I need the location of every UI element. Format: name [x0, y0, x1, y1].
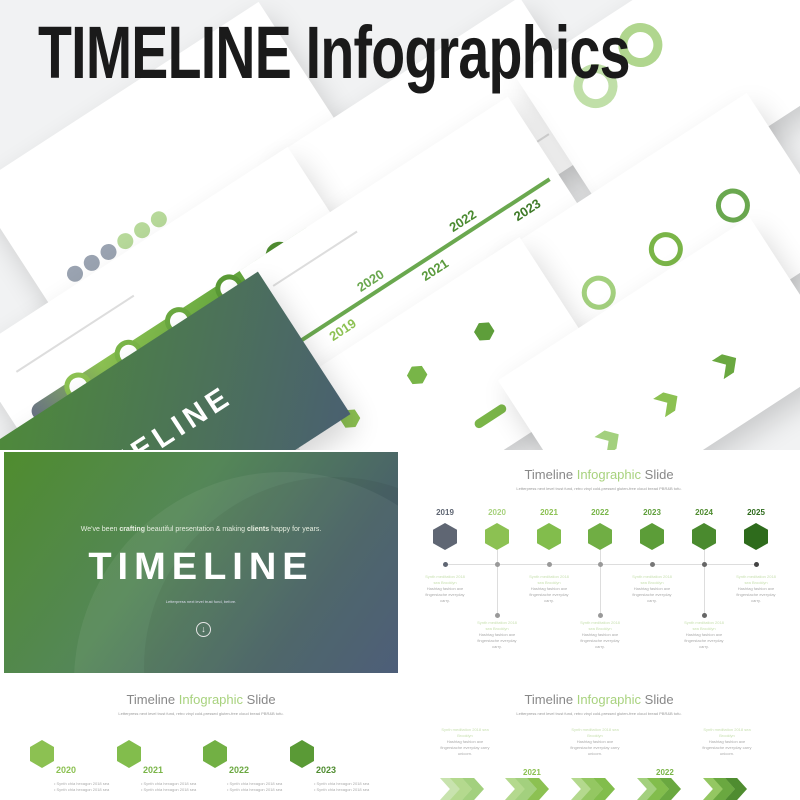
- chevron items: 2022: [656, 768, 674, 777]
- timeline items: 2024: [695, 508, 713, 517]
- card: rings right: [495, 93, 800, 407]
- timeline axis: [444, 564, 756, 565]
- timeline items: 2021: [540, 508, 558, 517]
- chevron items: [440, 727, 752, 800]
- card: bars: [268, 0, 612, 303]
- hexagon items: • Synth chia hexagon 2018 sea: [227, 787, 282, 792]
- panel: hexagon timeline slide: Letterpress next level trust fund, retro vinyl cold-pressed gluten-free cloud bread PBR&B tofu.: [516, 486, 682, 491]
- chevron items: Hashtag fashion axe fingerstache everyday carry unicorn.: [702, 739, 752, 756]
- card: 2019-2023 timeline: 2023: [511, 196, 543, 224]
- card: 2019-2023 timeline: 2020: [354, 266, 387, 295]
- chevron items: 2021: [523, 768, 541, 777]
- timeline items: 2019: [436, 508, 454, 517]
- panel: hexagon timeline slide: [425, 470, 776, 649]
- hexagon items: • Synth chia hexagon 2018 sea: [141, 781, 196, 786]
- small text: Letterpress next level trust fund, before.: [166, 599, 236, 604]
- panel: vertical hexagon slide: [30, 694, 370, 792]
- slide title: Timeline Infographic Slide: [524, 467, 674, 482]
- panel: timeline cover slide: [4, 452, 398, 673]
- timeline items: Hashtag fashion axe fingerstache everyday carry.: [632, 586, 672, 603]
- icon: down arrow circle: [196, 622, 211, 637]
- hexagon items: [30, 740, 370, 792]
- title: TIMELINE Infographics: [38, 11, 630, 94]
- timeline items: Hashtag fashion axe fingerstache everyday carry.: [425, 586, 465, 603]
- panel: chevron arrow slide: Letterpress next level trust fund, retro vinyl cold-pressed gluten-free cloud bread PBR&B tofu.: [516, 711, 682, 716]
- timeline items: Synth meditation 2018 sea Brooklyn: [529, 574, 569, 585]
- collage: perspective slide mockups: [0, 0, 800, 450]
- card: rings top right: [515, 0, 800, 227]
- card: 2019-2023 timeline: 2022: [446, 207, 479, 235]
- chevron items: Synth meditation 2018 sea Brooklyn: [571, 727, 619, 738]
- panel: vertical hexagon slide: Letterpress next level trust fund, retro vinyl cold-pressed gluten-free cloud bread PBR&B tofu.: [118, 711, 284, 716]
- timeline items: Synth meditation 2018 sea Brooklyn: [477, 620, 517, 631]
- card: wavy chain: [0, 147, 391, 513]
- chevron items: Synth meditation 2018 sea Brooklyn: [703, 727, 751, 738]
- card: circles timeline: [0, 2, 357, 338]
- hexagon items: • Synth chia hexagon 2018 sea: [54, 781, 109, 786]
- timeline items: 2023: [643, 508, 661, 517]
- hexagon items: 2023: [316, 765, 336, 775]
- timeline items: Hashtag fashion axe fingerstache everyday carry.: [736, 586, 776, 603]
- timeline items: 2025: [747, 508, 765, 517]
- hexagon items: • Synth chia hexagon 2018 sea: [314, 787, 369, 792]
- timeline items: Synth meditation 2018 sea Brooklyn: [580, 620, 620, 631]
- chevron items: Hashtag fashion axe fingerstache everyday carry unicorn.: [440, 739, 490, 756]
- timeline items: Hashtag fashion axe fingerstache everyday carry.: [580, 632, 620, 649]
- timeline items: Hashtag fashion axe fingerstache everyday carry.: [529, 586, 569, 603]
- card: arrows: [504, 227, 800, 450]
- hexagon items: • Synth chia hexagon 2018 sea: [54, 787, 109, 792]
- hexagon items: • Synth chia hexagon 2018 sea: [314, 781, 369, 786]
- hexagon items: • Synth chia hexagon 2018 sea: [227, 781, 282, 786]
- hexagon items: • Synth chia hexagon 2018 sea: [141, 787, 196, 792]
- heading: TIMELINE: TIMELINE: [88, 546, 314, 588]
- card: 2019-2023 timeline: [240, 97, 600, 413]
- icon: down arrow circle: ↓: [201, 624, 206, 634]
- timeline items: Hashtag fashion axe fingerstache everyday carry.: [684, 632, 724, 649]
- chevron items: Hashtag fashion axe fingerstache everyday carry unicorn.: [570, 739, 620, 756]
- panel: chevron arrow slide: [440, 694, 752, 800]
- slide title: Timeline Infographic Slide: [126, 692, 276, 707]
- tagline: We've been crafting beautiful presentation & making clients happy for years.: [81, 526, 321, 533]
- timeline items: [425, 508, 776, 649]
- timeline items: Synth meditation 2018 sea Brooklyn: [736, 574, 776, 585]
- timeline items: Hashtag fashion axe fingerstache everyday carry.: [477, 632, 517, 649]
- card: 2019-2023 timeline: 2019: [326, 316, 359, 344]
- card: hexagons: [296, 247, 587, 450]
- timeline items: Synth meditation 2018 sea Brooklyn: [684, 620, 724, 631]
- timeline items: 2022: [591, 508, 609, 517]
- chevron items: Synth meditation 2018 sea Brooklyn: [441, 727, 489, 738]
- timeline items: Synth meditation 2018 sea Brooklyn: [425, 574, 465, 585]
- slide title: Timeline Infographic Slide: [524, 692, 674, 707]
- card: dark green title slide: [0, 272, 350, 588]
- timeline items: 2020: [488, 508, 506, 517]
- hexagon items: 2022: [229, 765, 249, 775]
- hexagon items: 2021: [143, 765, 163, 775]
- card: 2019-2023 timeline: 2021: [419, 256, 451, 284]
- timeline items: Synth meditation 2018 sea Brooklyn: [632, 574, 672, 585]
- hexagon items: 2020: [56, 765, 76, 775]
